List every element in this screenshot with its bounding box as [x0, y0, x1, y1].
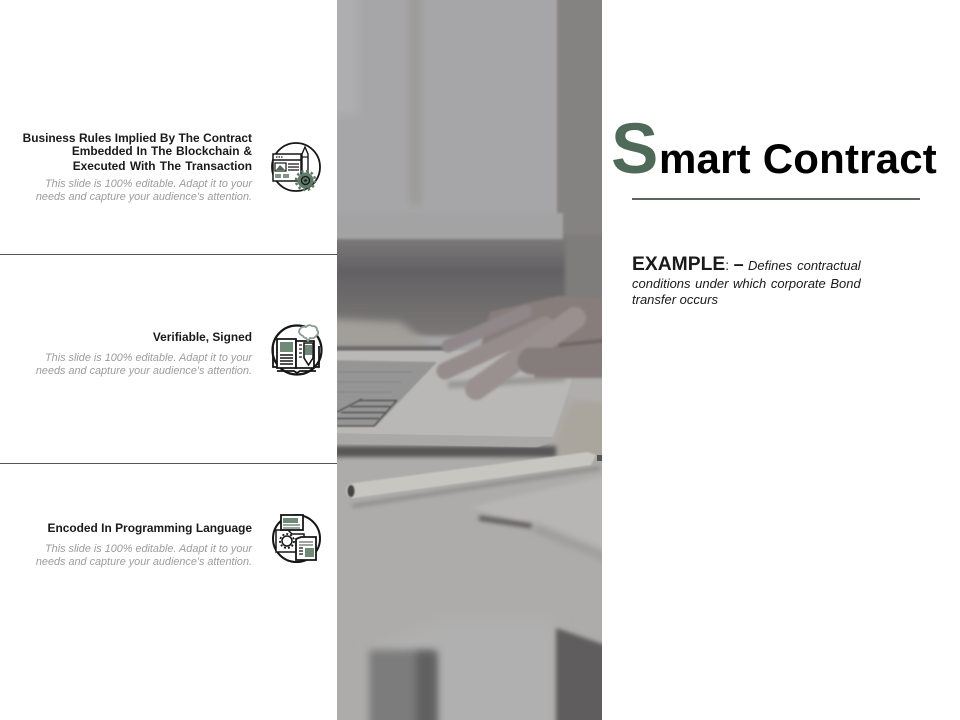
- hand: [448, 378, 565, 385]
- laptop shadow: [320, 446, 556, 457]
- text block: encoded in programming language: [36, 521, 252, 568]
- text block: business rules: Executed With The Transaction: [73, 159, 252, 173]
- blurred object: [370, 620, 555, 720]
- divider lines: [0, 254, 337, 255]
- title: S: [611, 110, 658, 189]
- text block: verifiable, signed: Verifiable, Signed: [153, 330, 252, 344]
- text block: encoded in programming language: This slide is 100% editable. Adapt it to your: [45, 543, 252, 555]
- icon: book, brain and pencil: [271, 324, 323, 376]
- text block: verifiable, signed: needs and capture your audience's attention.: [36, 365, 252, 377]
- icon: web window, pencil and gear: [271, 142, 321, 192]
- title underline: [632, 198, 920, 200]
- sill and wall beneath: [320, 236, 620, 336]
- title: [611, 110, 937, 189]
- text block: encoded in programming language: needs and capture your audience's attention.: [36, 556, 252, 568]
- window frame upper right: [557, 0, 627, 280]
- laptop body: [320, 346, 445, 351]
- photo panel: hand on laptop: [337, 0, 602, 720]
- text block: business rules: Business Rules Implied By The Contract: [23, 130, 252, 144]
- example text block: conditions under which corporate Bond: [632, 276, 861, 291]
- title: mart Contract: [659, 135, 937, 182]
- text block: business rules: [23, 130, 252, 202]
- text block: encoded in programming language: Encoded In Programming Language: [48, 521, 252, 535]
- example text block: transfer occurs: [632, 292, 718, 307]
- text block: business rules: Embedded In The Blockchain &: [72, 144, 252, 158]
- notepad: [470, 472, 620, 565]
- example text block: Defines contractual: [748, 258, 861, 273]
- text block: verifiable, signed: This slide is 100% editable. Adapt it to your: [45, 352, 252, 364]
- text block: business rules: This slide is 100% editable. Adapt it to your: [45, 178, 252, 190]
- icon: folder, gear and documents: [272, 514, 321, 563]
- example text block: EXAMPLE: –: [632, 254, 744, 275]
- text block: business rules: needs and capture your audience's attention.: [36, 190, 252, 202]
- text block: verifiable, signed: [36, 330, 252, 377]
- pen: [352, 468, 600, 506]
- example text block: [632, 254, 862, 307]
- keyboard: [320, 360, 437, 426]
- desk: [320, 350, 620, 720]
